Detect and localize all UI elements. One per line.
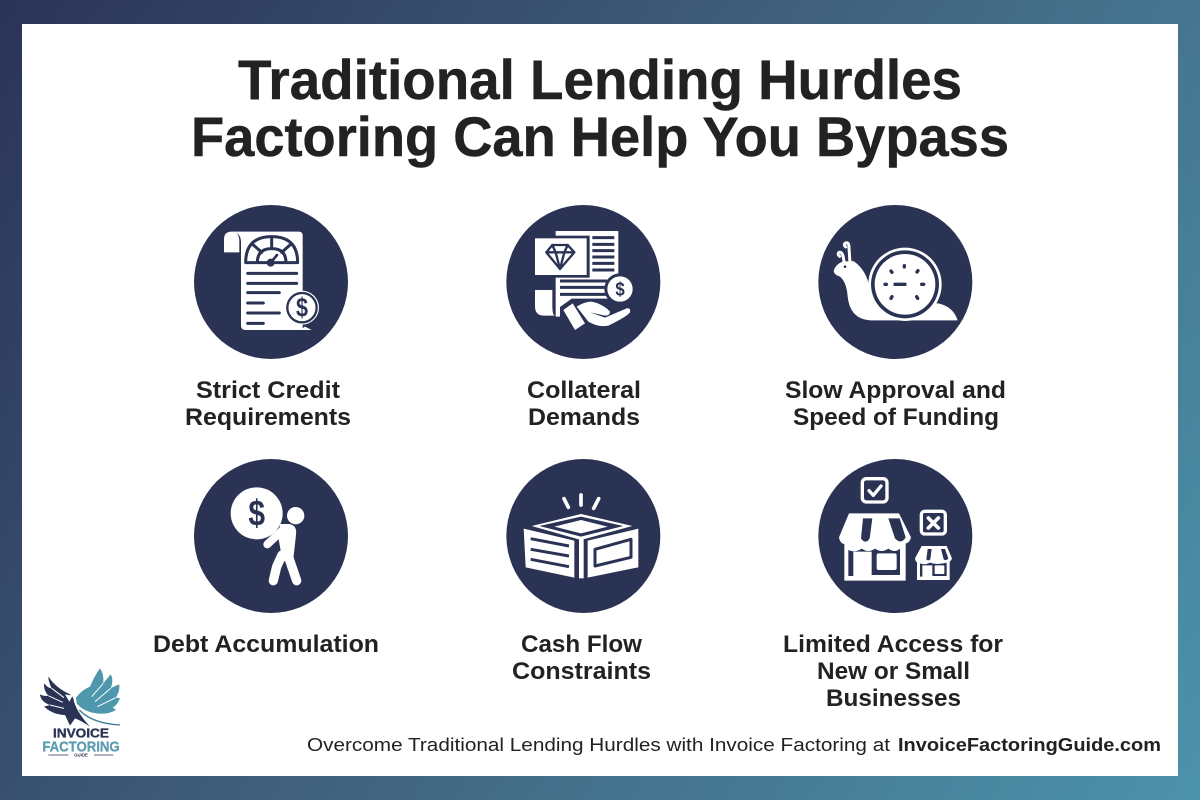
icon: large and small storefronts with check and cross: [818, 459, 972, 613]
label: Businesses: [826, 685, 961, 712]
title: Factoring Can Help You Bypass: [191, 105, 1009, 168]
wordmark: GUIDE: [74, 753, 88, 758]
footer call to action: InvoiceFactoringGuide.com: [898, 734, 1161, 755]
panel: strict credit requirements: [185, 205, 351, 431]
label: [785, 377, 1006, 431]
panel: limited access for new or small businesses: [783, 459, 1003, 712]
icon: open box: [506, 459, 660, 613]
panel: cash flow constraints: [506, 459, 660, 685]
icon: credit score document: $: [296, 292, 308, 322]
label: Slow Approval and: [785, 377, 1006, 404]
label: Limited Access for: [783, 631, 1003, 658]
title: Traditional Lending Hurdles: [238, 48, 962, 111]
logo: invoice factoring guide: [40, 668, 120, 758]
label: Constraints: [512, 658, 651, 685]
label: [512, 631, 651, 685]
icon: eagle wings: [40, 668, 120, 727]
label: [783, 631, 1003, 712]
panel: collateral demands: [506, 205, 660, 431]
icon: collateral document with diamond and hand: [506, 205, 660, 359]
footer call to action: Overcome Traditional Lending Hurdles with Invoice Factoring at: [307, 734, 890, 755]
label: Demands: [528, 404, 640, 431]
label: Strict Credit: [196, 377, 340, 404]
icon: person carrying a dollar coin: $: [248, 492, 265, 533]
icon: snail with clock shell: [818, 205, 972, 359]
panel: slow approval and speed of funding: [785, 205, 1006, 431]
label: Collateral: [527, 377, 641, 404]
label: [185, 377, 351, 431]
label: Debt Accumulation: [153, 631, 379, 658]
wordmark: FACTORING: [42, 739, 120, 755]
icon: credit score document: [194, 205, 348, 359]
icon: collateral document with diamond and hand: $: [615, 279, 625, 300]
wordmark: INVOICE: [53, 727, 109, 741]
icon: person carrying a dollar coin: [194, 459, 348, 613]
title: [191, 48, 1009, 168]
label: Cash Flow: [521, 631, 642, 658]
panel: debt accumulation: [153, 459, 379, 658]
label: Speed of Funding: [793, 404, 999, 431]
label: New or Small: [817, 658, 970, 685]
label: [527, 377, 641, 431]
footer call to action: [307, 734, 1161, 755]
label: Requirements: [185, 404, 351, 431]
wordmark: [42, 727, 120, 758]
